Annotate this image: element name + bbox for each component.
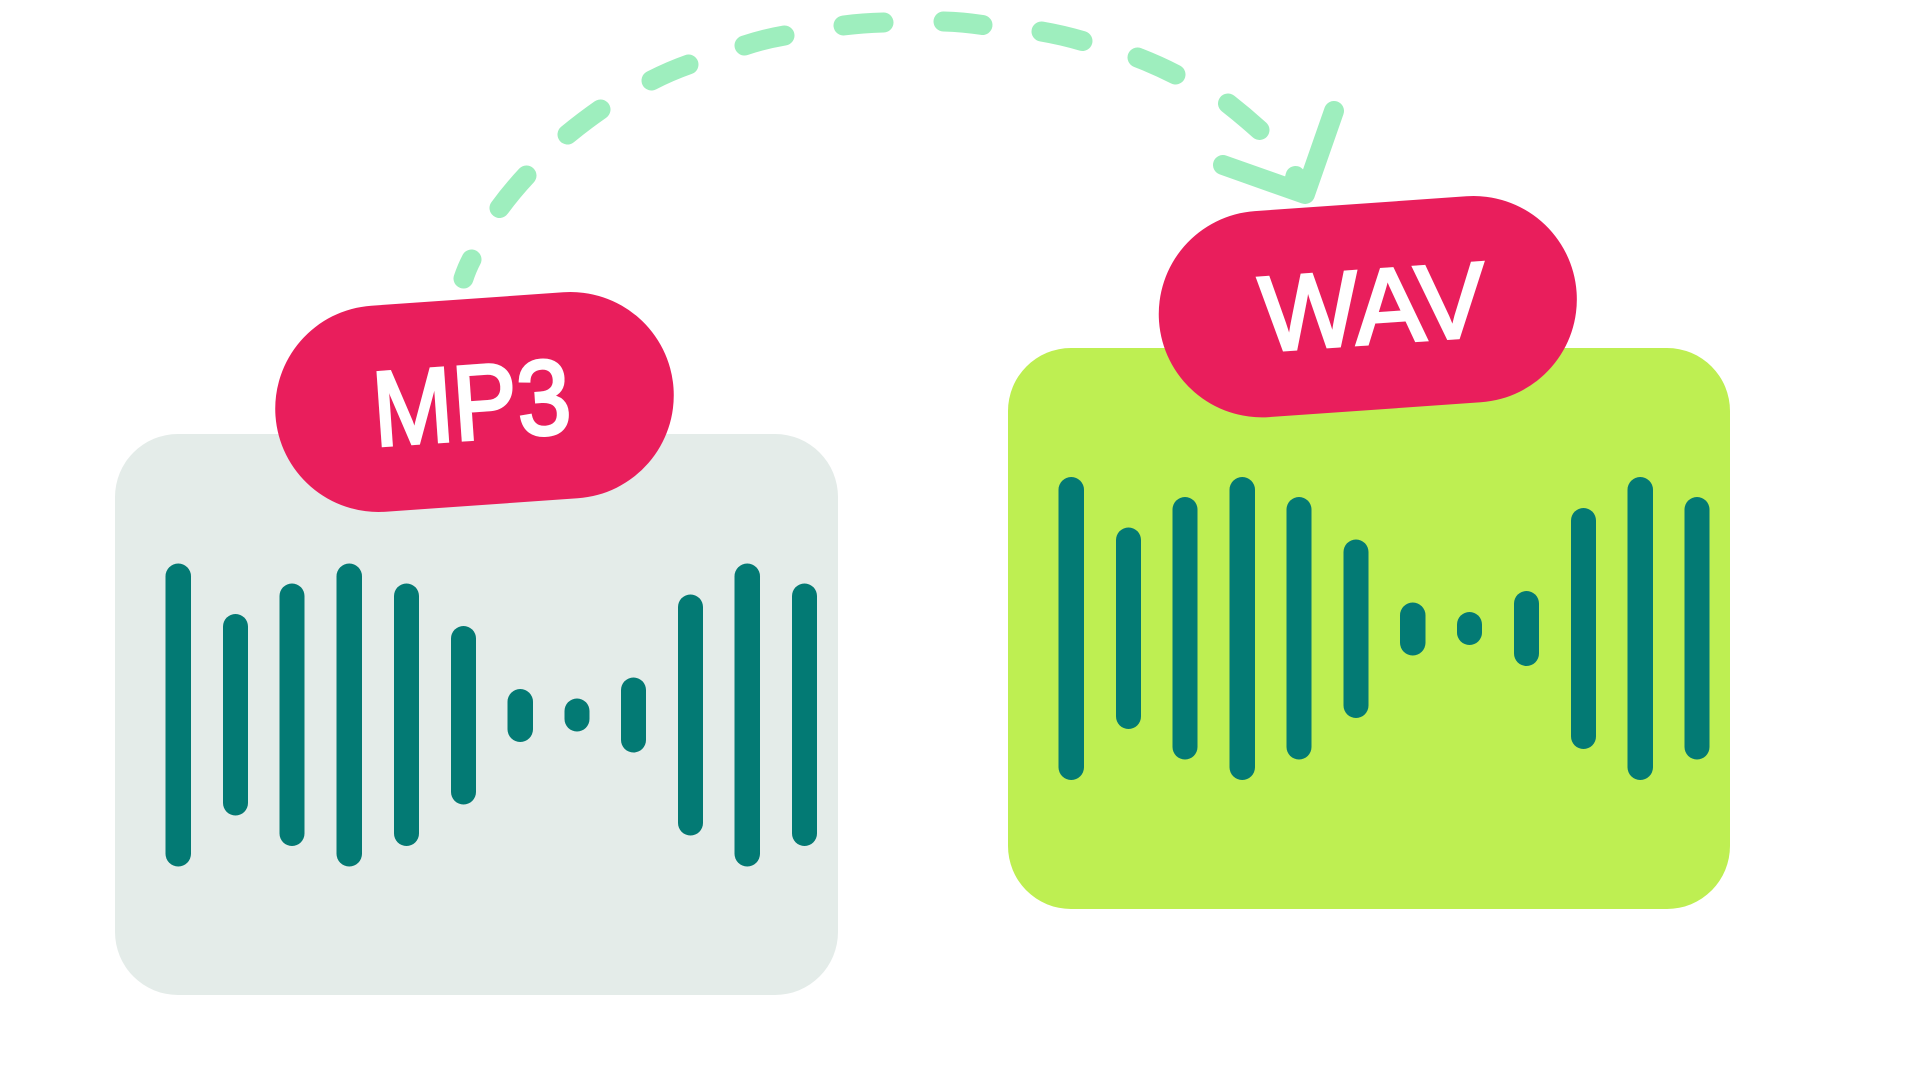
- waveform: WAV: [1058, 477, 1710, 780]
- waveform: MP3: [166, 564, 817, 866]
- arrow: dashed arc from MP3 to WAV: [464, 22, 1334, 278]
- arrowhead: [1223, 111, 1334, 194]
- panel: MP3 audio card: [115, 434, 838, 995]
- label: WAV: WAV: [1256, 241, 1490, 374]
- label: MP3: MP3: [369, 337, 574, 469]
- badge: WAV: [1152, 189, 1584, 424]
- badge: MP3: [268, 285, 681, 519]
- panel: WAV audio card: [1008, 348, 1730, 909]
